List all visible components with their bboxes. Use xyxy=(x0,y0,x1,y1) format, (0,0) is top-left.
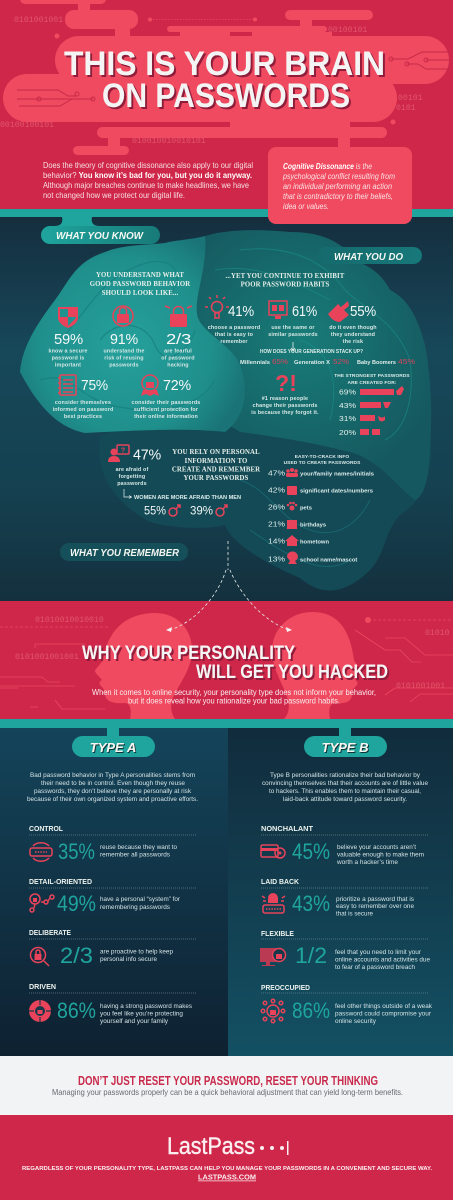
stat: 2/3 xyxy=(161,331,195,368)
item: nonchalant: 45% xyxy=(292,839,330,864)
stat: 41%: that is easy to xyxy=(215,332,254,338)
arrow xyxy=(124,489,132,498)
panel: type A xyxy=(0,719,453,1056)
bar chart: strongest passwords: 43% xyxy=(339,401,356,410)
heading: POOR PASSWORD HABITS xyxy=(241,282,329,288)
tagline: REGARDLESS OF YOUR PERSONALITY TYPE, LASTPASS CAN HELP YOU MANAGE YOUR PASSWORDS IN A CONVENIENT AND SECURE WAY. xyxy=(22,1166,433,1172)
stat: 47%: 47% xyxy=(133,446,161,464)
icon: notepad xyxy=(58,375,76,395)
list: easy to crack info: 13% xyxy=(268,554,285,564)
logo: LastPass: LastPass xyxy=(167,1133,255,1160)
icon: password field xyxy=(30,843,52,861)
item: deliberate: are proactive to help keep xyxy=(100,948,173,956)
stat: 59%: important xyxy=(55,362,81,368)
stat: 47%: forgetting xyxy=(119,474,145,480)
icons: info categories xyxy=(285,468,299,564)
generation stats: Generation X xyxy=(294,360,330,366)
item: driven: having a strong password makes xyxy=(100,1003,193,1010)
item: control: remember all passwords xyxy=(100,852,171,858)
item: driven: 86% xyxy=(57,998,96,1023)
panel: reset your thinking: Managing your passwords properly can be a quick behavioral adjustment that can yield long-term benefits. xyxy=(52,1088,403,1097)
item: detail-oriented xyxy=(29,877,197,916)
heading: WHY YOUR PERSONALITY xyxy=(82,643,295,664)
stat: 91%: passwords xyxy=(109,362,139,368)
heading: YOU RELY ON PERSONAL xyxy=(172,449,260,456)
stat: 61%: use the same or xyxy=(271,325,315,331)
stat: 72%: consider their passwords xyxy=(132,400,200,406)
binary decoration xyxy=(15,616,450,691)
item: laid back: LAID BACK xyxy=(261,877,299,886)
bar chart: strongest passwords: 31% xyxy=(339,414,356,423)
paragraph: passwords, they don’t believe they are personally at risk xyxy=(34,788,192,795)
paragraph xyxy=(262,772,428,803)
binary decoration: 0101 xyxy=(396,104,416,113)
item: flexible: FLEXIBLE xyxy=(261,929,294,938)
heading: SHOULD LOOK LIKE... xyxy=(102,290,178,297)
item: driven: DRIVEN xyxy=(29,982,56,991)
stat: 61%: 61% xyxy=(292,303,317,320)
title xyxy=(64,45,385,115)
paragraph: laid-back attitude toward password security. xyxy=(283,796,407,803)
stat: 72% xyxy=(132,377,200,420)
list: easy to crack info: 21% xyxy=(268,520,285,528)
stat: 91%: 91% xyxy=(110,331,138,348)
header cloud shapes xyxy=(3,0,449,155)
stat: 2/3: 2/3 xyxy=(166,331,191,348)
bar chart: strongest passwords: THE STRONGEST PASSWORDS xyxy=(334,373,410,379)
paragraph: to hackers. This enables them to maintain their casual, xyxy=(269,788,421,795)
forgot reason: change their passwords xyxy=(252,403,318,409)
heading: YOUR PASSWORDS xyxy=(184,475,249,482)
list: easy to crack info: EASY-TO-CRACK INFO xyxy=(295,454,349,460)
circuit traces xyxy=(0,617,453,709)
stat: 41% xyxy=(208,303,260,345)
icon: wheel lock xyxy=(29,1000,51,1022)
stat: 72%: sufficient protection for xyxy=(134,407,199,413)
stat: 41%: choose a password xyxy=(208,325,260,331)
bar chart: strongest passwords: 69% xyxy=(339,388,356,396)
list: easy to crack info: significant dates/numbers xyxy=(300,488,373,494)
intro text: Although major breaches continue to make headlines, we have xyxy=(43,181,249,190)
binary decoration: 01010010010010 xyxy=(35,616,104,625)
paragraph: because of their own organized system and proactive efforts. xyxy=(27,796,198,803)
item: control: CONTROL xyxy=(29,824,63,833)
heading xyxy=(82,643,388,683)
binary decoration: 0101001001001 xyxy=(15,653,79,662)
women vs men: WOMEN ARE MORE AFRAID THAN MEN xyxy=(134,495,241,501)
stat: 55%: 55% xyxy=(350,303,376,320)
icon: shield xyxy=(58,307,78,328)
pill: type A: TYPE A xyxy=(90,740,136,755)
panel: type B xyxy=(228,727,453,1056)
stat: 59%: 59% xyxy=(54,331,83,348)
stat: 55%: do it even though xyxy=(329,325,377,331)
item: driven: you feel like you’re protecting xyxy=(100,1010,183,1018)
stat: 91%: risk of reusing xyxy=(104,356,144,362)
item: detail-oriented: remembering passwords xyxy=(100,904,171,911)
item: preoccupied: feel other things outside of a weak xyxy=(335,1003,433,1010)
pill: what you remember xyxy=(60,543,188,561)
subheading xyxy=(92,688,376,706)
icon: alarm lock xyxy=(165,306,192,327)
item: preoccupied: password could compromise your xyxy=(335,1010,432,1018)
item: nonchalant: worth a hacker’s time xyxy=(336,859,398,866)
item: nonchalant: valuable enough to make them xyxy=(337,852,424,858)
stat: 47%: are afraid of xyxy=(116,467,148,473)
title: ON PASSWORDS xyxy=(102,77,350,115)
binary decoration: 00100100101 xyxy=(0,121,54,130)
icon: alarm password xyxy=(262,893,285,913)
callout: cognitive dissonance: an individual performing an action xyxy=(283,182,392,191)
item: control: reuse because they want to xyxy=(100,844,177,851)
women vs men: 55% xyxy=(144,504,166,518)
stat: 75%: best practices xyxy=(64,414,102,420)
pill: type B: TYPE B xyxy=(322,740,368,755)
heading: INFORMATION TO xyxy=(185,458,247,465)
stat: 47% xyxy=(116,446,161,487)
stat: 61% xyxy=(268,303,318,338)
stat: 75%: 75% xyxy=(81,377,108,394)
item: preoccupied: online security xyxy=(335,1018,377,1025)
icon: monitor xyxy=(269,301,287,319)
list: easy to crack info: 26% xyxy=(268,502,285,512)
icon: circular lock xyxy=(113,306,133,326)
item: laid back xyxy=(261,877,429,918)
brain illustration xyxy=(20,230,431,590)
intro text: behavior? You know it’s bad for you, but you do it anyway. xyxy=(43,171,252,180)
heading: CREATE AND REMEMBER xyxy=(172,466,260,474)
item: flexible: 1/2 xyxy=(295,943,327,968)
icon: lightbulb xyxy=(205,295,229,318)
pill: what you know: WHAT YOU KNOW xyxy=(56,230,144,242)
paragraph: their need to be in control. Even though they reuse xyxy=(41,780,185,787)
list: easy to crack info xyxy=(268,454,374,564)
generation stats: 65% xyxy=(272,357,288,366)
stat: 72%: 72% xyxy=(163,377,191,394)
list: easy to crack info: pets xyxy=(300,506,312,512)
stat: 55% xyxy=(329,303,377,345)
intro text: not changed how we protect our digital life. xyxy=(43,191,185,200)
pill: what you do: WHAT YOU DO xyxy=(334,251,403,263)
stat: 59%: password is xyxy=(52,356,84,362)
list: easy to crack info: birthdays xyxy=(300,522,326,528)
binary decoration: 00100101 xyxy=(328,26,367,35)
pill: type A xyxy=(72,727,155,757)
subheading: but it does reveal how you rationalize your bad password habits. xyxy=(128,696,340,706)
generation stats: 52% xyxy=(333,357,349,366)
stat: 59% xyxy=(48,331,88,368)
circuit traces xyxy=(17,18,449,106)
stat: 41%: 41% xyxy=(228,303,254,320)
list: easy to crack info: your/family names/initials xyxy=(300,472,374,478)
item: deliberate: personal info secure xyxy=(100,956,157,963)
pill: what you know xyxy=(41,217,160,244)
arrow xyxy=(291,342,295,351)
item: detail-oriented: have a personal “system” for xyxy=(100,896,181,903)
heading: ...YET YOU CONTINUE TO EXHIBIT xyxy=(226,273,345,280)
item: deliberate: 2/3 xyxy=(60,943,93,968)
pill: type B xyxy=(304,727,387,757)
list: easy to crack info: school name/mascot xyxy=(300,558,357,564)
icon: person with question bubble: ? xyxy=(121,448,125,454)
forgot reason: #1 reason people xyxy=(262,396,308,402)
stat: 75% xyxy=(53,377,113,420)
paragraph: Type B personalities rationalize their bad behavior by xyxy=(270,772,421,779)
item: nonchalant: NONCHALANT xyxy=(261,824,313,833)
icon: person with question bubble xyxy=(108,445,129,462)
stat: 55%: they understand xyxy=(331,332,375,338)
item: flexible xyxy=(260,929,430,971)
item: detail-oriented: DETAIL-ORIENTED xyxy=(29,877,92,886)
panel: personality section xyxy=(0,601,453,719)
stat: 72%: their online information xyxy=(134,414,198,420)
stat: 47%: passwords xyxy=(117,481,147,487)
paragraph: convincing themselves that their accounts are of little value xyxy=(262,780,428,787)
item: driven: yourself and your family xyxy=(100,1018,169,1025)
generation stats: 45% xyxy=(398,357,415,366)
item: laid back: easy to remember over one xyxy=(336,903,414,910)
item: control: 35% xyxy=(58,839,95,864)
callout: cognitive dissonance: Cognitive Dissonance is the xyxy=(283,162,373,171)
arrow: dashed split xyxy=(166,541,292,632)
generation stats: HOW DOES YOUR GENERATION STACK UP? xyxy=(260,349,363,355)
generation stats xyxy=(240,349,415,366)
heading: GOOD PASSWORD BEHAVIOR xyxy=(90,281,190,288)
bar chart: strongest passwords xyxy=(334,373,410,437)
item: nonchalant xyxy=(261,824,429,866)
stat: 75%: informed on password xyxy=(53,407,113,413)
stat: 2/3: of password xyxy=(161,356,195,362)
icon: lock network xyxy=(30,894,54,912)
head: right silhouette xyxy=(272,612,362,719)
intro text xyxy=(43,161,253,200)
callout: cognitive dissonance: idea or values. xyxy=(283,202,329,211)
stat: 41%: remember xyxy=(220,339,248,345)
icon: question exclamation: ?! xyxy=(275,370,297,396)
item: laid back: prioritize a password that is xyxy=(336,896,415,903)
binary decoration: 01010 xyxy=(425,629,450,638)
pill: what you do xyxy=(318,247,422,264)
item: nonchalant: believe your accounts aren’t xyxy=(337,844,416,851)
item: preoccupied: PREOCCUPIED xyxy=(261,983,310,992)
women vs men: 39% xyxy=(190,504,213,518)
item: control xyxy=(29,824,197,864)
item: driven xyxy=(29,982,197,1025)
forgot reason: is because they forgot it. xyxy=(251,410,319,416)
callout: cognitive dissonance: that is contradictory to their beliefs, xyxy=(283,192,393,201)
bar chart: strongest passwords: ARE CREATED FOR: xyxy=(348,380,397,386)
item: flexible: feel that you need to limit your xyxy=(335,949,422,956)
panel: brain section background xyxy=(0,209,453,601)
generation stats: Baby Boomers xyxy=(357,360,396,366)
list: easy to crack info: hometown xyxy=(300,540,329,546)
paragraph xyxy=(27,772,198,803)
stat: 75%: consider themselves xyxy=(55,400,111,406)
list: easy to crack info: 14% xyxy=(268,536,285,546)
item: detail-oriented: 49% xyxy=(57,891,96,916)
panel: what you know xyxy=(48,272,200,420)
icon: broken lock xyxy=(328,301,349,322)
list: easy to crack info: 47% xyxy=(268,468,285,478)
intro text: Does the theory of cognitive dissonance also apply to our digital xyxy=(43,161,253,170)
callout: cognitive dissonance xyxy=(268,147,412,224)
url: LASTPASS.COM xyxy=(198,1172,256,1182)
pill: what you remember: WHAT YOU REMEMBER xyxy=(70,547,179,559)
heading: WILL GET YOU HACKED xyxy=(196,662,388,683)
callout: cognitive dissonance: psychological conflict resulting from xyxy=(282,172,395,181)
item: flexible: online accounts and activities due xyxy=(335,956,430,964)
title: THIS IS YOUR BRAIN xyxy=(64,45,385,83)
icon: badge xyxy=(141,375,159,396)
item: preoccupied: 86% xyxy=(292,998,330,1023)
panel: footer xyxy=(0,1115,453,1200)
item: laid back: that is secure xyxy=(336,910,373,918)
item: flexible: to fear of a password breach xyxy=(335,964,415,971)
item: laid back: 43% xyxy=(292,891,330,916)
icon: monitor lock xyxy=(260,948,286,966)
panel: reset your thinking xyxy=(0,1056,453,1115)
stat: 91%: understand the xyxy=(103,348,145,354)
item: deliberate: DELIBERATE xyxy=(29,928,71,937)
item: preoccupied xyxy=(261,983,433,1025)
panel: header xyxy=(0,0,453,209)
list: easy to crack info: USED TO CREATE PASSWORDS xyxy=(284,460,361,466)
stat: 2/3: are fearful xyxy=(164,348,192,354)
binary decoration xyxy=(0,16,423,146)
stat: 2/3: hacking xyxy=(167,362,189,368)
stat: 55%: the risk xyxy=(343,339,363,345)
bar chart: strongest passwords: 20% xyxy=(339,428,356,437)
binary decoration: 0101001001 xyxy=(14,16,63,25)
icon: card lock xyxy=(261,845,285,858)
list: easy to crack info: 42% xyxy=(268,486,285,494)
panel: what you do xyxy=(205,273,415,437)
stat: 59%: know a secure xyxy=(48,348,88,354)
binary decoration: 010010010010101 xyxy=(132,137,206,146)
binary decoration: 00101 xyxy=(398,94,423,103)
binary decoration: 0101001001 xyxy=(396,682,445,691)
generation stats: Millennials xyxy=(240,360,270,366)
icon: lock hub xyxy=(261,999,285,1023)
icon: magnifier lock xyxy=(30,948,49,966)
stat: 91% xyxy=(103,331,145,368)
panel: what you remember xyxy=(108,445,374,564)
subheading: When it comes to online security, your personality type does not inform your behavior, xyxy=(92,688,376,697)
paragraph: Bad password behavior in Type A personalities stems from xyxy=(30,772,195,779)
stat: 61%: similar passwords xyxy=(268,332,318,338)
women vs men xyxy=(134,495,241,518)
head: left silhouette xyxy=(95,613,192,719)
item: deliberate xyxy=(29,928,197,968)
heading: YOU UNDERSTAND WHAT xyxy=(96,272,184,279)
